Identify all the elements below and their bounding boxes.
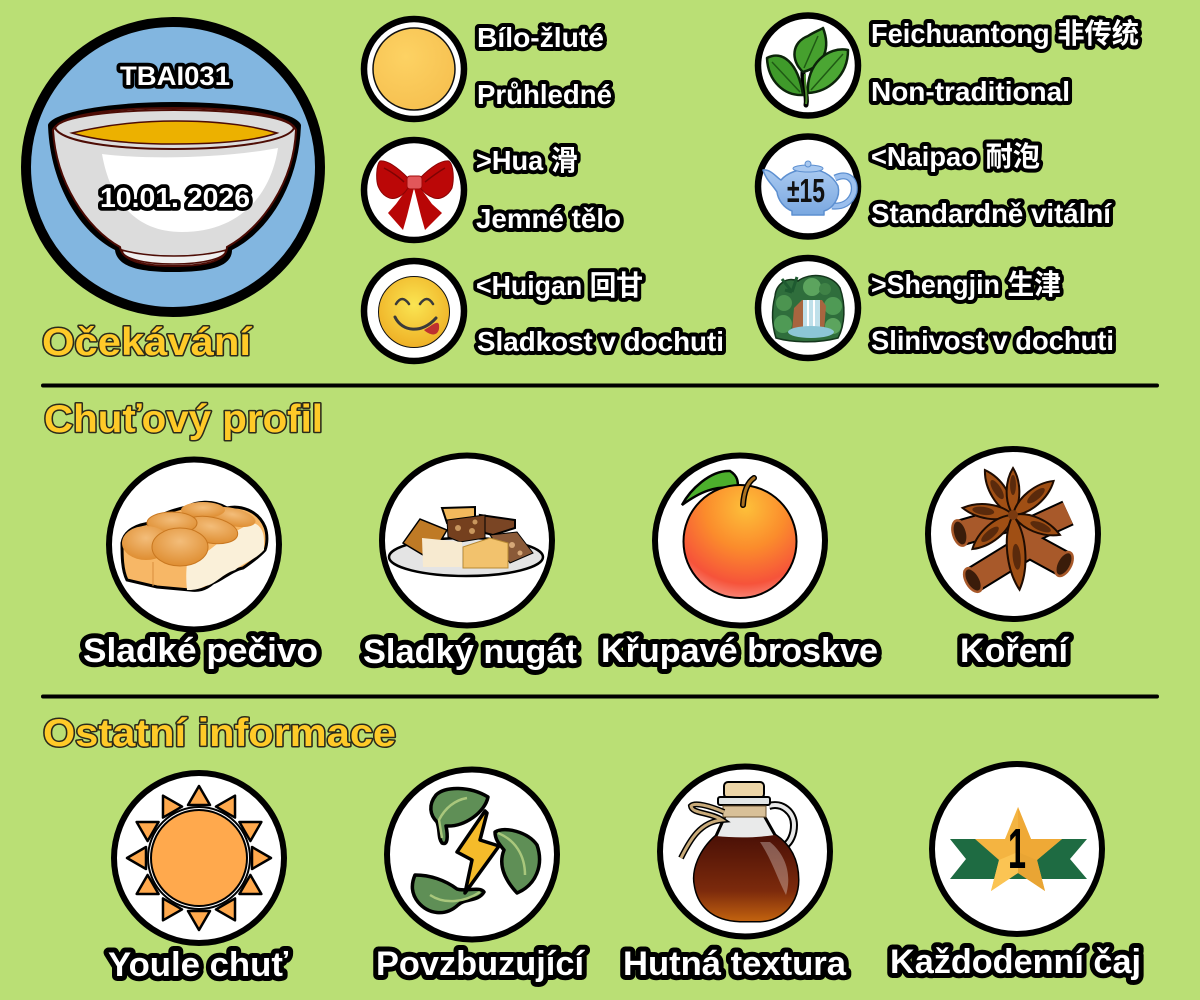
flavour: sweet pastry (83, 460, 318, 670)
shengjin label: >Shengjin 生津 (871, 269, 1061, 300)
vitality label: Standardně vitální (871, 198, 1112, 229)
info: thick texture (623, 766, 847, 983)
attribute: tradition (758, 16, 1139, 116)
icon: syrup bottle (660, 766, 830, 936)
flavour: spice (928, 449, 1098, 670)
info: strong flavour (108, 773, 289, 984)
icon: red bow (364, 140, 464, 240)
sweetness label: Sladkost v dochuti (477, 326, 724, 357)
naipao label: <Naipao 耐泡 (871, 141, 1040, 172)
info: invigorating (376, 770, 586, 983)
body label: Jemné tělo (476, 203, 621, 234)
salivation label: Slinivost v dochuti (871, 325, 1114, 356)
icon: number one star badge (932, 764, 1102, 934)
feichuantong label: Feichuantong 非传统 (871, 18, 1139, 49)
attribute: salivation (758, 258, 1114, 358)
attribute: aftertaste sweetness (364, 261, 724, 361)
icon: tea leaves (758, 16, 858, 116)
icon: leaves and lightning (387, 770, 557, 940)
invigorating label: Povzbuzující (376, 945, 586, 983)
attribute: colour (364, 19, 612, 119)
icon: sun (114, 773, 284, 943)
heading: other information: Ostatní informace (43, 712, 396, 755)
heading: flavour profile: Chuťový profil (44, 398, 323, 441)
flavour: crisp peach (601, 456, 878, 670)
icon: number one star badge: 1 (1008, 817, 1026, 881)
attribute: steeping endurance (758, 136, 1112, 236)
icon: bread loaf (109, 460, 279, 630)
bowl date: 10.01. 2026 (100, 182, 250, 213)
bowl code: TBAI031 (120, 61, 230, 91)
spice label: Koření (960, 632, 1070, 670)
attribute: body (364, 140, 621, 240)
sweet pastry label: Sladké pečivo (83, 632, 318, 670)
icon: plate of nougat (382, 456, 552, 626)
colour label: Bílo-žluté (477, 22, 604, 53)
icon: blue teapot (758, 136, 858, 236)
clarity label: Průhledné (477, 79, 612, 110)
icon: peach (655, 456, 825, 626)
icon: jungle waterfall (758, 258, 858, 358)
icon: blue teapot: ±15 (787, 172, 825, 209)
crisp peach label: Křupavé broskve (601, 632, 878, 670)
icon: tea bowl (48, 102, 301, 272)
huigan label: <Huigan 回甘 (476, 270, 643, 301)
thick texture label: Hutná textura (623, 945, 847, 983)
info: daily tea (890, 764, 1141, 981)
strong flavour label: Youle chuť (108, 946, 289, 984)
hua label: >Hua 滑 (476, 145, 578, 176)
daily tea label: Každodenní čaj (890, 943, 1141, 981)
heading: expectation: Očekávání (42, 321, 252, 364)
icon: liquor colour disc (364, 19, 464, 119)
icon: cinnamon and star anise (928, 449, 1098, 619)
flavour: sweet nougat (363, 456, 577, 671)
icon: smiling face (364, 261, 464, 361)
panel: tea bowl badge (26, 22, 320, 312)
sweet nougat label: Sladký nugát (363, 633, 577, 671)
non-traditional label: Non-traditional (871, 76, 1070, 107)
